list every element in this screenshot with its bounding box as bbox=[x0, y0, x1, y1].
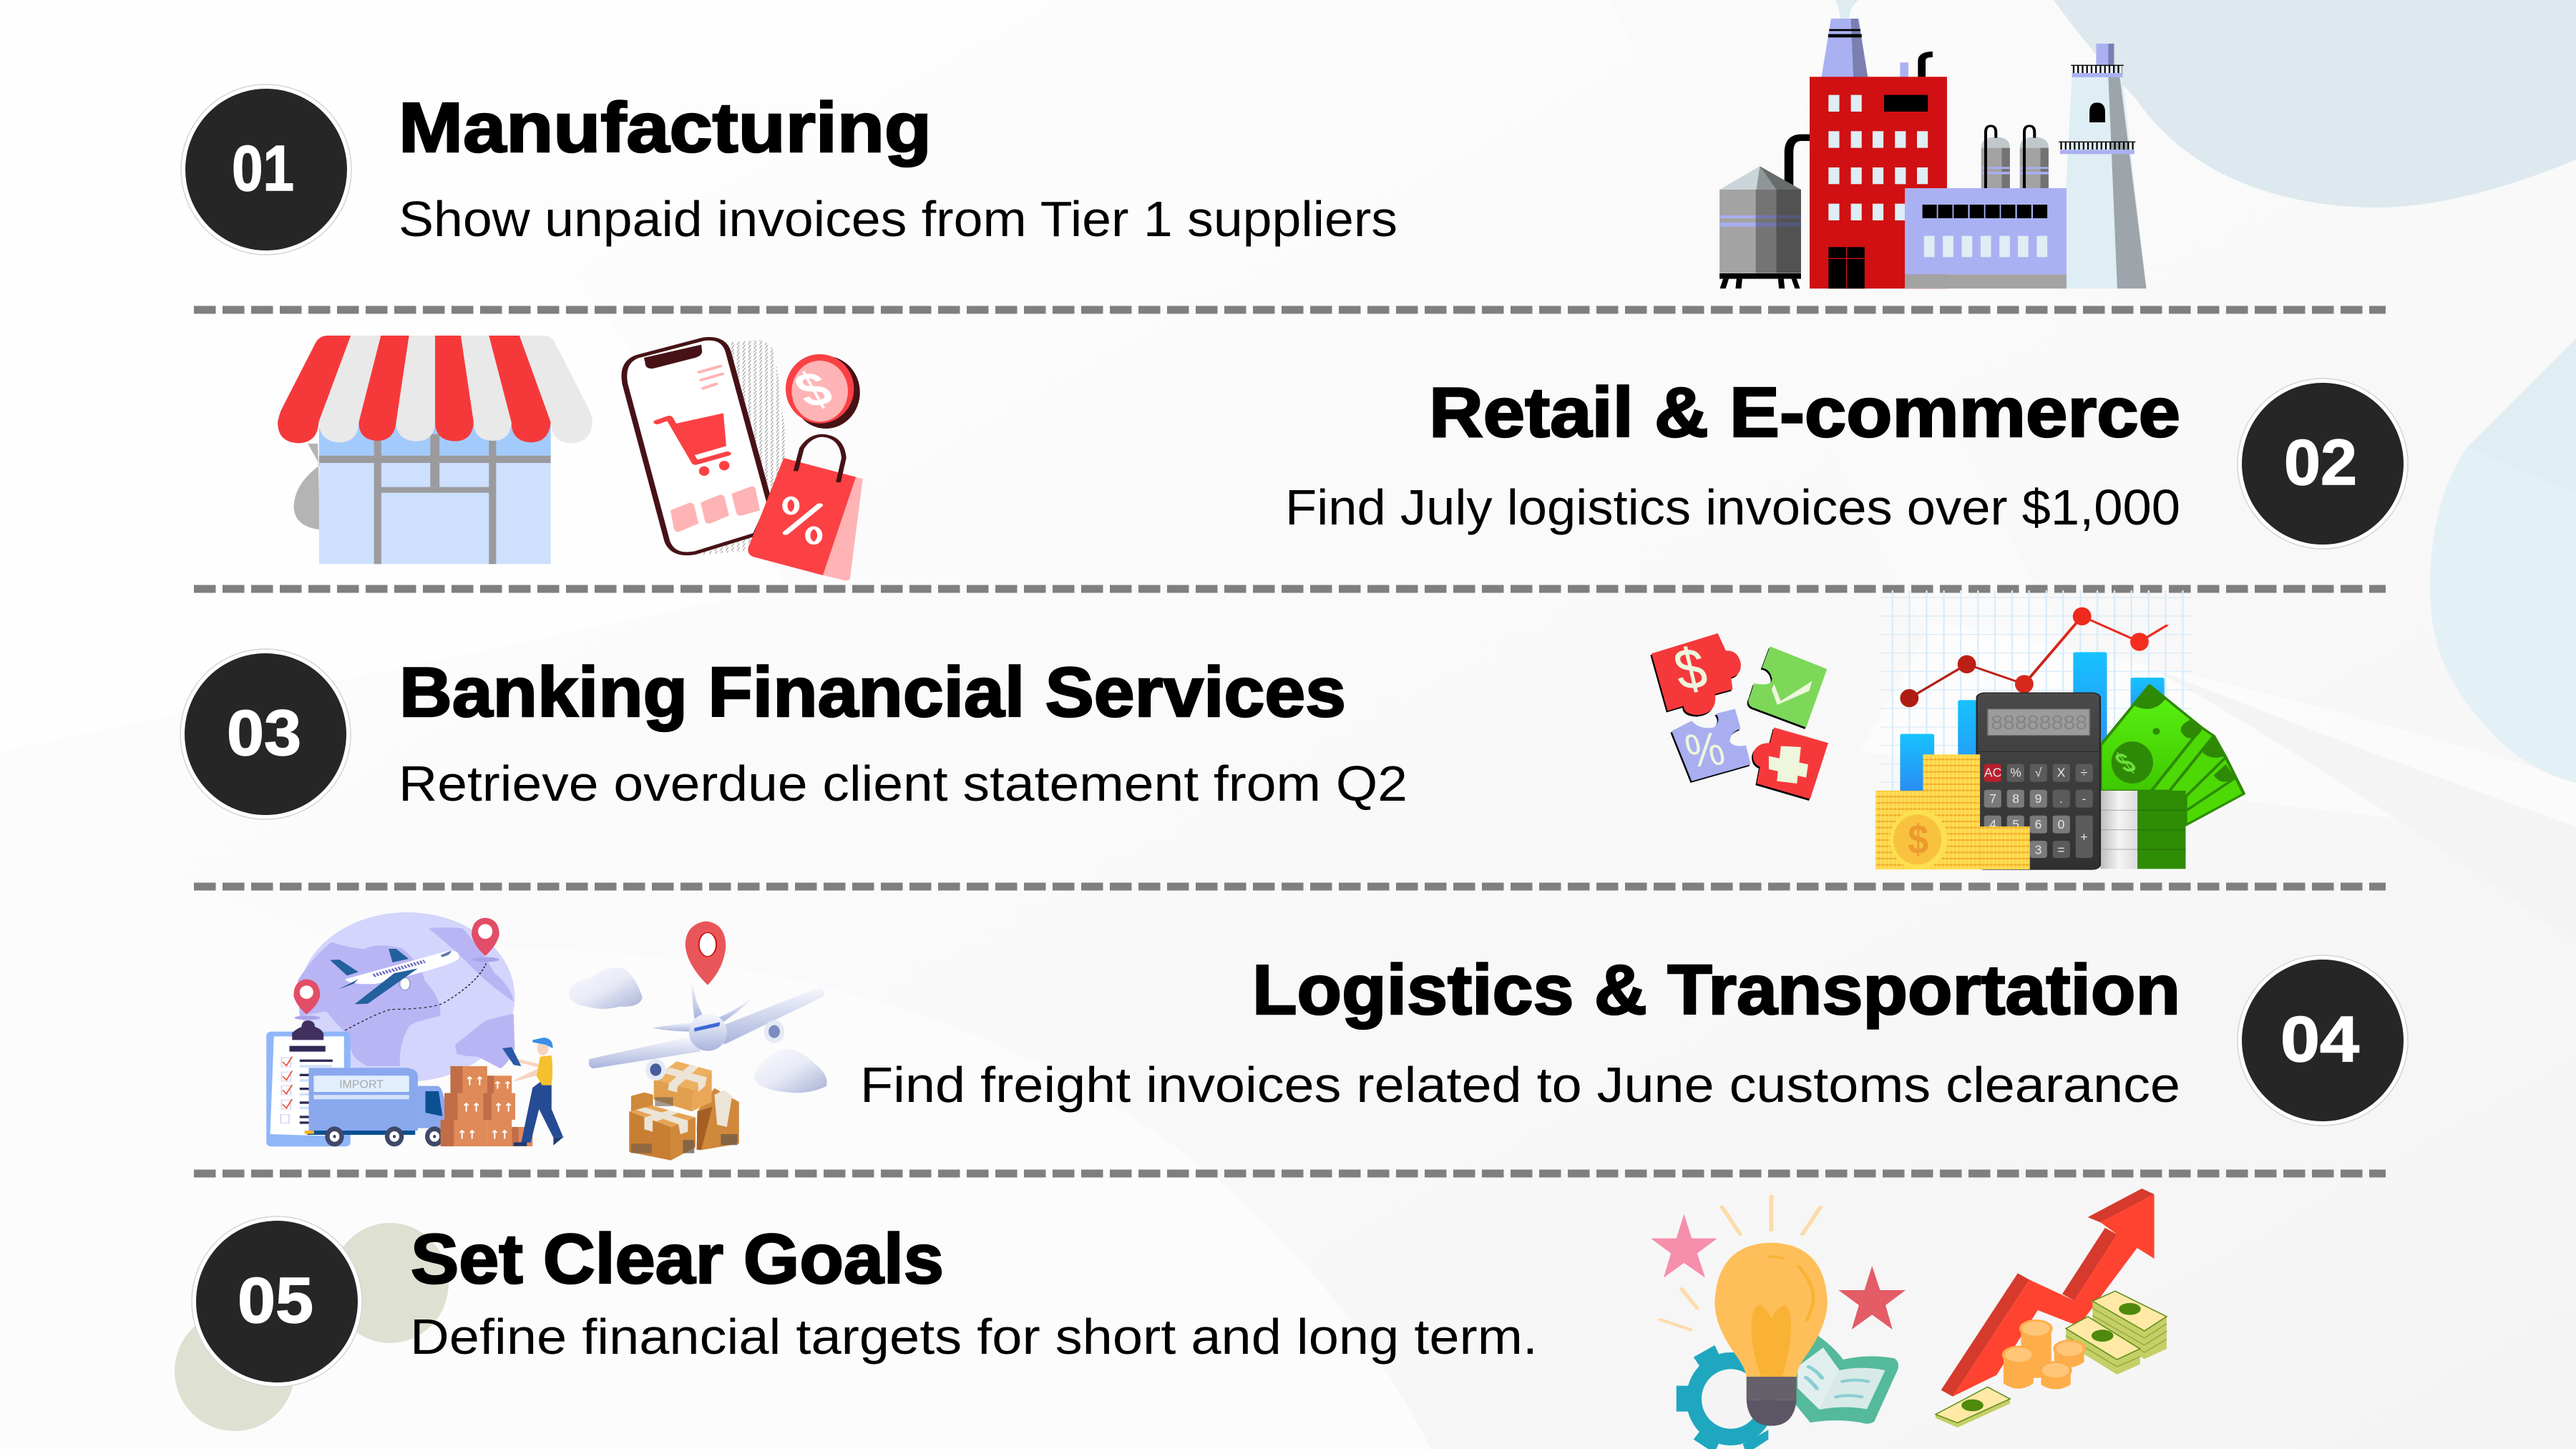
chart icon: calculator, coins, banknotes and rising line: % bbox=[2010, 766, 2021, 780]
icon: red location pin bbox=[686, 921, 726, 985]
chart icon: calculator, coins, banknotes and rising line: $ bbox=[1908, 816, 1928, 862]
chart icon: calculator, coins, banknotes and rising line: 5 bbox=[2012, 817, 2019, 831]
icon: import truck, globe, plane and worker bbox=[266, 912, 564, 1146]
chart icon: calculator, coins, banknotes and rising line: 88888888 bbox=[1991, 712, 2087, 734]
icon: delivery truck bbox=[305, 1068, 448, 1146]
badge 05 bbox=[192, 1216, 362, 1387]
badge 02 bbox=[2238, 379, 2408, 549]
icon: puzzle pieces: % bbox=[1680, 723, 1729, 778]
icon: stacked cartons bbox=[441, 1066, 532, 1146]
chart icon: calculator, coins, banknotes and rising line: - bbox=[2082, 791, 2087, 806]
icon: puzzle pieces bbox=[1650, 633, 1828, 801]
chart icon: calculator, coins, banknotes and rising line: 3 bbox=[2035, 842, 2041, 857]
chart icon: calculator, coins, banknotes and rising line: 9 bbox=[2035, 791, 2041, 806]
icon: storefront bbox=[278, 336, 592, 564]
heading: Logistics & Transportation: Logistics & Transportation bbox=[1252, 950, 2180, 1029]
chart icon: calculator, coins, banknotes and rising line: 0 bbox=[2058, 817, 2064, 831]
banknote fan bbox=[2100, 686, 2244, 825]
description: Retrieve overdue client statement from Q2 bbox=[399, 756, 1407, 811]
heading: Set Clear Goals: Set Clear Goals bbox=[411, 1219, 944, 1298]
icon: stacked cartons: ↑↑ bbox=[494, 1101, 514, 1114]
badge 04 bbox=[2238, 955, 2408, 1126]
icon: globe bbox=[298, 912, 514, 1082]
chart icon: calculator, coins, banknotes and rising line: √ bbox=[2035, 766, 2042, 780]
gold coin stacks bbox=[2004, 1320, 2084, 1390]
icon: air freight with plane, clouds, pin and parcels bbox=[569, 921, 827, 1161]
badge 02: 02 bbox=[2284, 427, 2357, 499]
dashed flight route bbox=[345, 964, 486, 1030]
icon: warehouse worker bbox=[502, 1038, 564, 1146]
row 3: banking financial services bbox=[180, 590, 2244, 869]
badge 01: 01 bbox=[232, 133, 294, 205]
icon: airplane bbox=[330, 949, 459, 1004]
badge 03: 03 bbox=[227, 698, 301, 769]
chart icon: calculator, coins, banknotes and rising line: = bbox=[2057, 842, 2065, 857]
dashed dividers bbox=[194, 310, 2386, 1174]
description: Define financial targets for short and long term. bbox=[410, 1309, 1538, 1365]
icon: stacked cartons: ↑↑ bbox=[457, 1128, 477, 1142]
badge 05: 05 bbox=[238, 1265, 313, 1337]
banknote stacks bbox=[1936, 1291, 2167, 1428]
heading: Retail & E-commerce: Retail & E-commerce bbox=[1429, 373, 2180, 452]
icon: checklist clipboard bbox=[266, 1020, 351, 1146]
row 5: set clear goals bbox=[192, 1189, 2167, 1449]
description: Find July logistics invoices over $1,000 bbox=[1285, 479, 2180, 535]
chart icon: calculator, coins, banknotes and rising line: AC bbox=[1984, 766, 2001, 780]
row 2: retail and e-commerce bbox=[278, 336, 2408, 580]
icon: rising arrow with coins and banknotes bbox=[1936, 1189, 2167, 1428]
chart icon: calculator, coins, banknotes and rising line: + bbox=[2080, 829, 2088, 844]
chart icon: calculator, coins, banknotes and rising line: 7 bbox=[1989, 791, 1996, 806]
icon: stacked cartons: ↑↑ bbox=[462, 1101, 482, 1114]
badge 01 bbox=[181, 84, 351, 255]
plane engines and cockpit bbox=[645, 1020, 784, 1080]
icon: phone with cart, coin and shopping bag: $ bbox=[785, 362, 841, 418]
decorative olive circles behind badge 05 bbox=[175, 1223, 449, 1431]
icon: stacked cartons: ↑↑ bbox=[464, 1075, 484, 1088]
icon: white airplane bbox=[589, 982, 825, 1068]
chart icon: calculator, coins, banknotes and rising line: . bbox=[2059, 791, 2063, 806]
icon: parcels bbox=[629, 1061, 739, 1161]
row 1: manufacturing bbox=[181, 0, 2147, 288]
row 4: logistics and transportation bbox=[266, 912, 2408, 1161]
icon: clouds bbox=[569, 968, 827, 1093]
chart icon: calculator, coins, banknotes and rising line bbox=[1875, 590, 2244, 869]
chart icon: calculator, coins, banknotes and rising line: 6 bbox=[2035, 817, 2041, 831]
badge 03 bbox=[180, 649, 351, 819]
icon: stacked cartons: ↑↑ bbox=[493, 1080, 512, 1091]
icon: location pins bbox=[293, 918, 499, 1020]
chart icon: calculator, coins, banknotes and rising line: $ bbox=[2108, 747, 2143, 779]
icon: stacked cartons: ↑↑ bbox=[489, 1128, 509, 1142]
chart icon: calculator, coins, banknotes and rising line: ÷ bbox=[2081, 766, 2088, 780]
description: Find freight invoices related to June customs clearance bbox=[860, 1057, 2180, 1113]
icon: factory bbox=[1719, 0, 2147, 288]
badge 04: 04 bbox=[2280, 1004, 2359, 1075]
chart icon: calculator, coins, banknotes and rising line: X bbox=[2057, 766, 2066, 780]
icon: light bulb with gear, book and stars bbox=[1651, 1196, 1906, 1449]
description: Show unpaid invoices from Tier 1 suppliers bbox=[399, 191, 1397, 247]
icon: delivery truck: IMPORT bbox=[339, 1079, 384, 1091]
icon: phone with cart, coin and shopping bag bbox=[624, 338, 863, 580]
icon: puzzle pieces: $ bbox=[1669, 637, 1712, 702]
chart icon: calculator, coins, banknotes and rising line: 4 bbox=[1989, 817, 1996, 831]
heading: Banking Financial Services: Banking Financial Services bbox=[399, 653, 1346, 731]
chart icon: calculator, coins, banknotes and rising line: 8 bbox=[2012, 791, 2019, 806]
heading: Manufacturing: Manufacturing bbox=[399, 88, 932, 167]
